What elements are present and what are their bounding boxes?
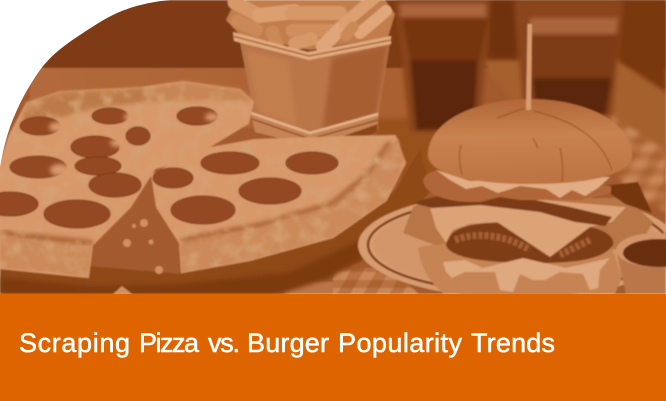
lettuce [403,198,653,250]
cheese covering pepperoni [49,112,219,176]
beef patty [446,223,613,263]
title: Trends [471,328,555,358]
drink: left glass [395,0,490,132]
basket base [252,114,379,138]
restaurant background [0,0,666,294]
title: Pizza [139,328,200,358]
burger [403,24,653,294]
dinner plate [356,203,666,294]
basket body [240,42,390,136]
pizza: right slice [152,136,405,272]
fries basket [225,0,395,152]
lower lettuce and cheese drips [443,258,610,292]
fries [225,0,395,56]
pepperoni slices [0,107,338,228]
title: Popularity [338,328,462,358]
title banner [0,294,666,401]
sauce cup [616,233,666,294]
melted cheese [430,198,626,257]
checked tablecloth [285,116,666,294]
cheese mottling [0,80,410,280]
bottom bun [418,242,622,294]
top cheese drips [436,170,610,198]
title: Burger [247,328,329,358]
toothpick [526,24,532,110]
drink: right glass [514,0,624,116]
pizza: left slices [0,82,253,277]
photo: pizza and burger duotone [0,0,666,298]
wooden pizza board [0,150,432,294]
title: Scraping [19,328,130,358]
title: vs. [208,328,240,358]
top bun [428,99,632,184]
bacon [413,193,612,226]
basket rim [233,32,391,60]
pizza crumbs [113,219,163,294]
tomato slice [423,170,611,202]
